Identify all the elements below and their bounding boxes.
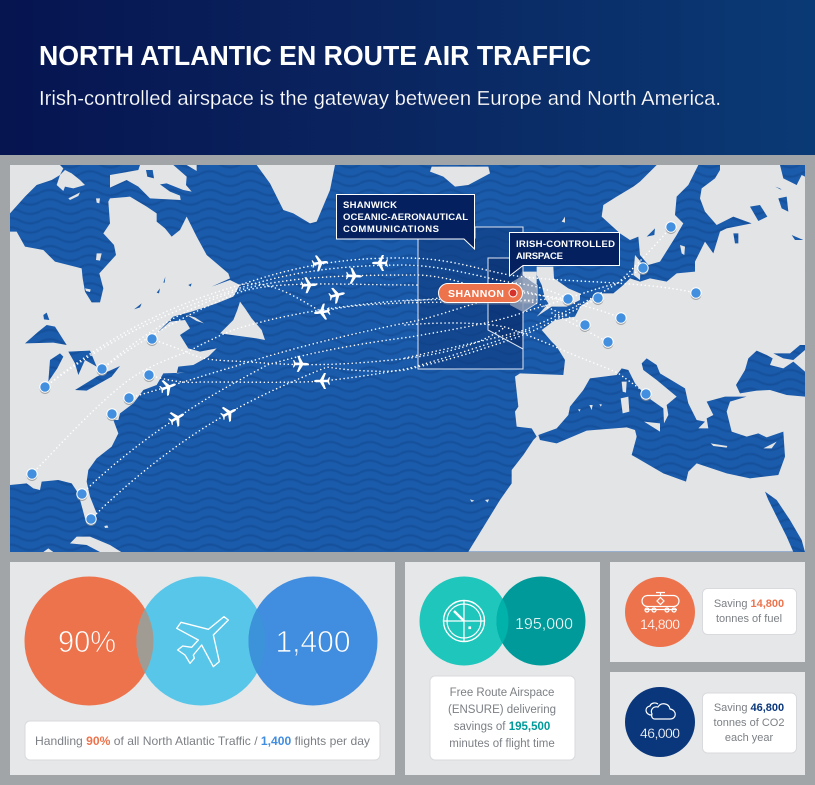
marker: Shannon: SHANNON [448,288,504,300]
panel: traffic share [10,562,395,775]
callout: Shanwick: SHANWICK [343,200,397,211]
caption: CO2 savings: Saving 46,800 [714,702,784,714]
aircraft icons on routes [158,254,388,429]
circle: 14,800: 14,800 [640,616,680,632]
Ireland highlight [510,276,537,312]
caption: fuel savings: tonnes of fuel [716,613,782,625]
header panel [0,0,815,155]
caption: free route airspace: savings of 195,500 [454,721,550,733]
circle: 46,000 [625,687,695,757]
icon: plane [220,406,236,422]
icon: plane [168,412,184,427]
callout: Irish-controlled airspace [510,232,620,276]
circle: 46,000: 46,000 [640,725,680,741]
circle: aircraft [136,576,266,706]
caption: free route airspace [430,676,575,760]
caption: free route airspace: (ENSURE) delivering [448,704,556,716]
caption: free route airspace: Free Route Airspace [450,687,554,699]
circle: radar [420,576,508,666]
airspace: Irish-controlled region [488,258,537,349]
circle: 195,000: 195,000 [515,616,573,633]
circle: 90% [24,576,154,706]
icon: plane [300,276,318,294]
caption: fuel savings: Saving 14,800 [714,598,784,610]
caption: traffic share [25,721,380,760]
marker: Shannon [438,284,522,304]
icon: fuel tanker [642,592,679,612]
flight routes [32,227,696,519]
icon: plane [293,356,309,372]
circle: 1,400 [248,576,378,706]
caption: traffic share: Handling 90% of all North Atlantic Traffic / 1,400 flights per day [35,734,370,748]
caption: CO2 savings [702,693,796,753]
European airport markers [563,222,701,401]
callout: Shanwick: OCEANIC-AERONAUTICAL [343,212,468,223]
icon: aircraft outline [177,617,228,667]
panel: fuel savings [610,562,805,662]
North American airport markers [27,334,157,526]
subtitle: Irish-controlled airspace is the gateway between Europe and North America. [39,87,721,110]
airspace: Shanwick oceanic region [418,227,523,369]
callout: Shanwick: COMMUNICATIONS [343,224,439,235]
callout: Shanwick [336,194,474,249]
panel: free route airspace [405,562,600,775]
icon: plane [346,268,362,284]
circle: 1,400: 1,400 [276,624,350,659]
icon: plane [312,255,328,272]
caption: CO2 savings: tonnes of CO2 [714,717,784,729]
icon: plane [372,255,388,271]
icon: radar [443,600,485,642]
map: Europe and Africa landmass [430,165,805,552]
panel: CO2 savings [610,672,805,775]
title: NORTH ATLANTIC EN ROUTE AIR TRAFFIC [39,40,591,71]
callout: Irish-controlled airspace: AIRSPACE [516,251,563,262]
callout: Irish-controlled airspace: IRISH-CONTROLLED [516,239,615,250]
circle: 90%: 90% [58,624,116,659]
icon: cloud [646,703,675,719]
icon: plane [314,304,330,320]
caption: free route airspace: minutes of flight time [449,738,555,750]
icon: plane [328,288,345,304]
circle: 14,800 [625,577,695,647]
caption: CO2 savings: each year [725,732,773,744]
icon: plane [159,380,176,396]
caption: fuel savings [702,588,796,634]
map: Mediterranean and Black Sea [538,345,805,552]
panel: air traffic map [0,160,815,577]
icon: plane [314,373,330,389]
map: North America landmass [0,160,815,577]
circle: 195,000 [496,576,586,666]
